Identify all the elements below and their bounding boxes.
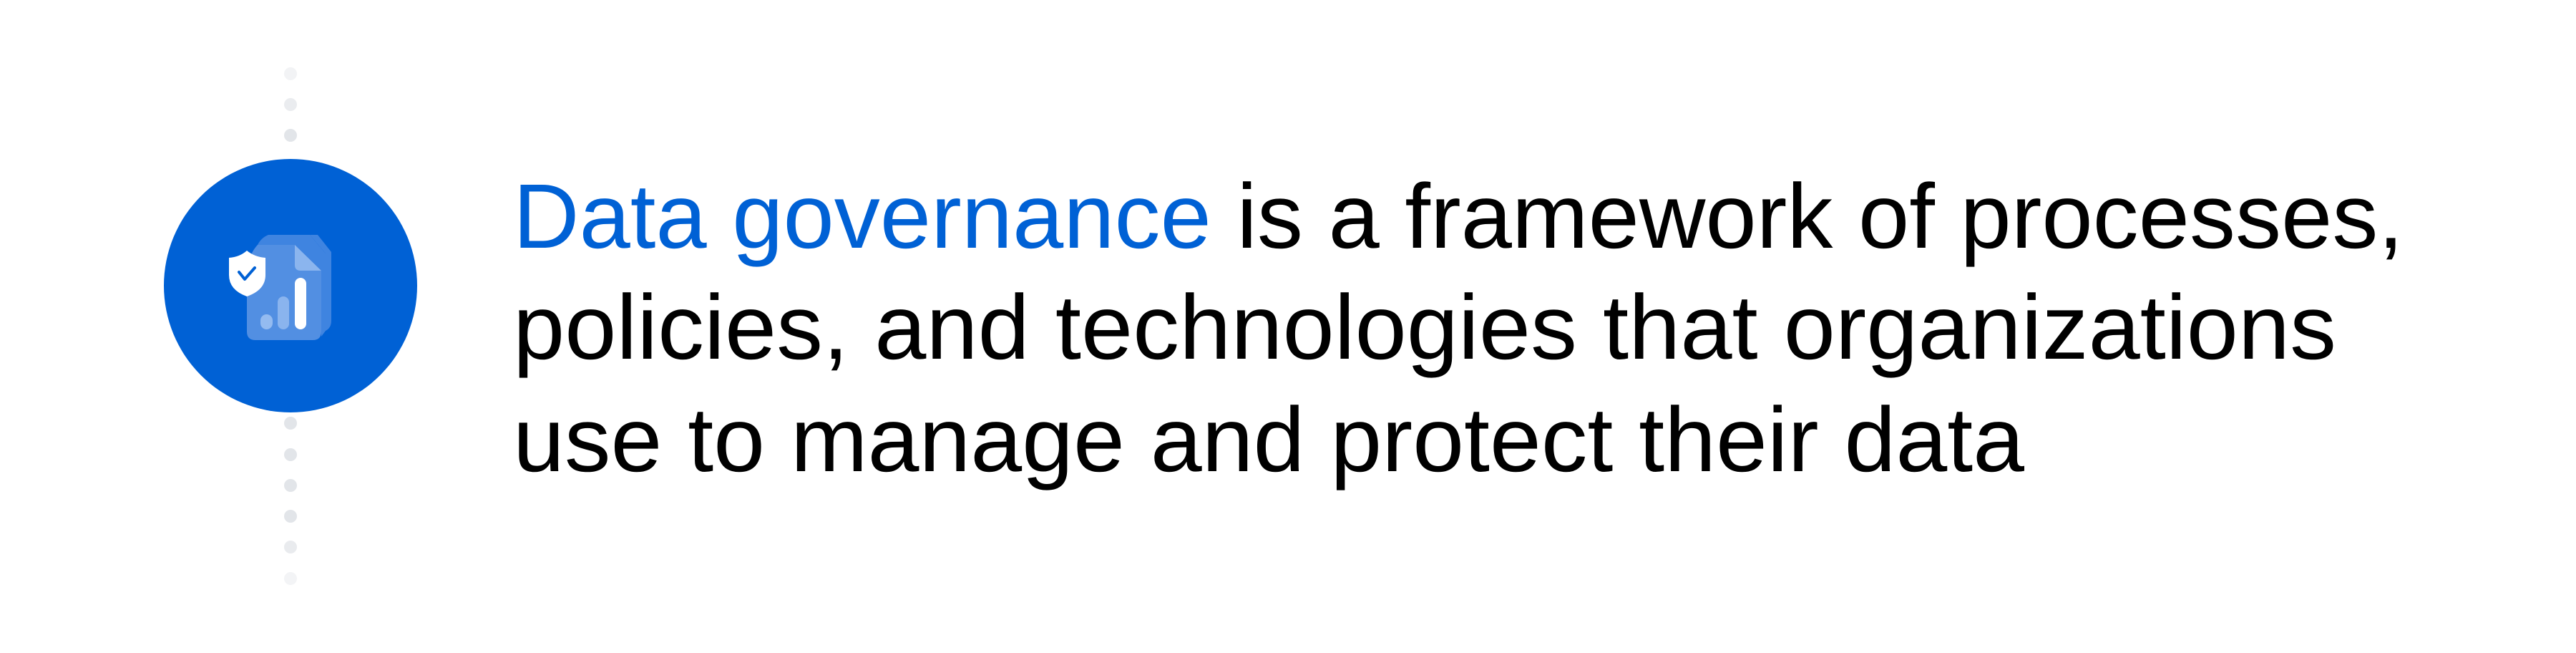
definition text: policies, and technologies that organizations <box>513 276 2336 379</box>
definition text: use to manage and protect their data <box>513 389 2025 491</box>
dotted timeline <box>284 67 297 585</box>
definition text: Data governance is a framework of processes, <box>513 165 2404 268</box>
icon circle <box>164 159 417 412</box>
definition text <box>513 165 2404 491</box>
icon: data document with shield <box>229 235 331 340</box>
